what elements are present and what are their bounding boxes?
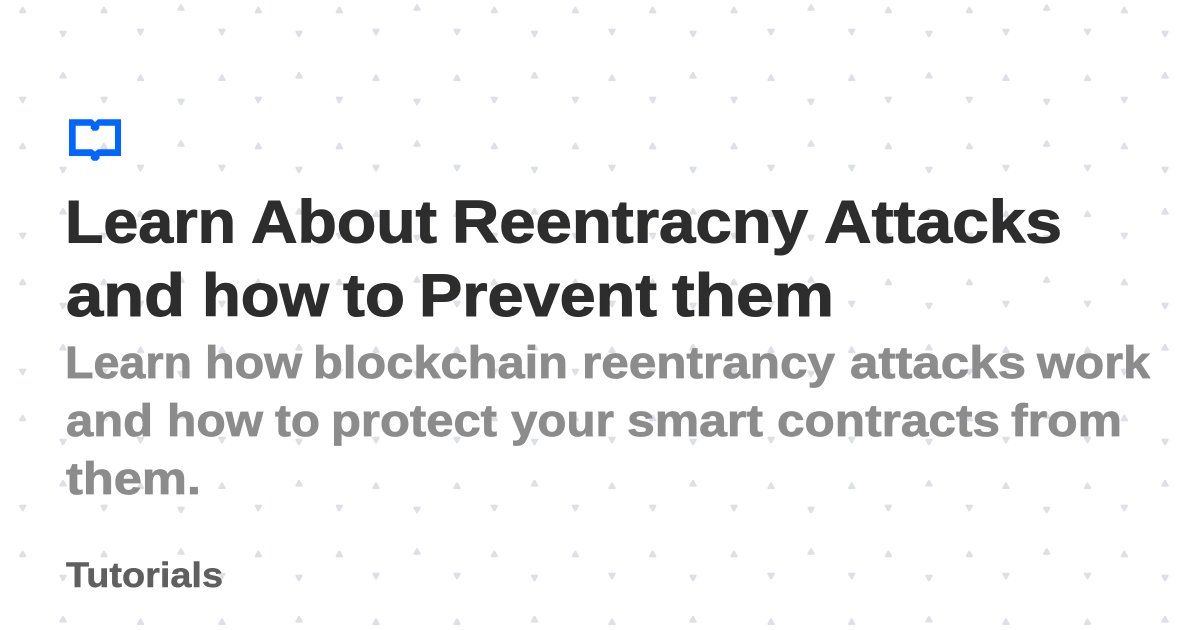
subtitle: them. bbox=[66, 453, 201, 504]
subtitle bbox=[65, 337, 1151, 504]
title: and bbox=[66, 262, 185, 329]
subtitle: reentrancy bbox=[582, 337, 835, 388]
subtitle: how bbox=[205, 337, 303, 388]
subtitle: contracts bbox=[777, 395, 1000, 446]
title: About bbox=[251, 188, 437, 256]
title: Prevent bbox=[419, 262, 657, 329]
title: Learn bbox=[65, 188, 236, 256]
subtitle: to bbox=[275, 395, 320, 446]
subtitle: protect bbox=[331, 395, 497, 446]
category label: Tutorials bbox=[66, 556, 223, 595]
icon: open book bbox=[69, 119, 121, 161]
title: how bbox=[202, 262, 329, 329]
subtitle: your bbox=[511, 395, 614, 446]
subtitle: smart bbox=[627, 395, 763, 446]
subtitle: attacks bbox=[850, 337, 1026, 388]
title: to bbox=[343, 262, 405, 329]
title: Attacks bbox=[824, 188, 1062, 256]
subtitle: from bbox=[1011, 395, 1122, 446]
title: Reentracny bbox=[452, 188, 809, 256]
subtitle: Learn bbox=[65, 337, 192, 388]
subtitle: and bbox=[66, 395, 153, 446]
subtitle: how bbox=[167, 395, 264, 446]
subtitle: work bbox=[1036, 337, 1151, 388]
subtitle: blockchain bbox=[313, 337, 568, 388]
title: them bbox=[672, 262, 834, 329]
title bbox=[65, 188, 1062, 329]
